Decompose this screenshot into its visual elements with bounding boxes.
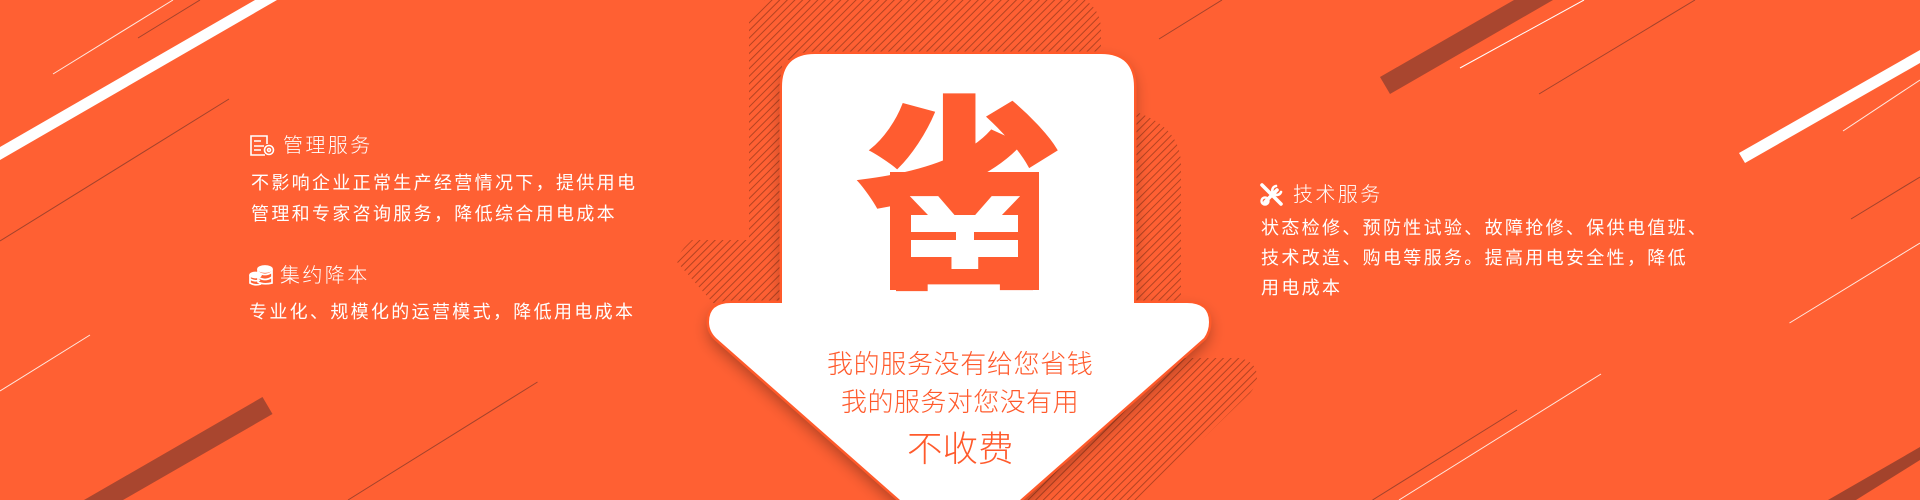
text: management description xyxy=(251,173,637,224)
big character 省 with yen block: 省 xyxy=(858,33,1062,330)
text: technical description: 技术改造、购电等服务。提高用电安全性，降低 xyxy=(1261,248,1688,268)
hatched shapes behind arrow xyxy=(677,0,1257,500)
text: technical description: 状态检修、预防性试验、故障抢修、保供电值班、 xyxy=(1261,218,1708,238)
icon: document with gear xyxy=(251,136,274,155)
text: management description: 管理和专家咨询服务，降低综合用电成本 xyxy=(251,204,617,224)
arrow slogan line 1: 我的服务没有给您省钱 xyxy=(827,349,1094,379)
white down arrow xyxy=(709,54,1209,500)
icon: crossed wrench and screwdriver xyxy=(1262,185,1281,204)
arrow slogan line 2: 我的服务对您没有用 xyxy=(841,387,1079,417)
arrow slogan line 3: 不收费 xyxy=(907,429,1014,469)
text: management description: 不影响企业正常生产经营情况下，提供用电 xyxy=(251,173,637,193)
heading: technical service: 技术服务 xyxy=(1293,184,1383,206)
text: technical description: 用电成本 xyxy=(1261,278,1342,298)
icon: coin stacks xyxy=(250,266,272,285)
text: cost reduction description: 专业化、规模化的运营模式，降低用电成本 xyxy=(249,302,635,322)
text: technical description xyxy=(1261,218,1708,298)
heading: management service: 管理服务 xyxy=(283,135,373,157)
heading: cost reduction: 集约降本 xyxy=(280,265,370,287)
big character 省 with yen block: ¥ xyxy=(909,173,1021,292)
